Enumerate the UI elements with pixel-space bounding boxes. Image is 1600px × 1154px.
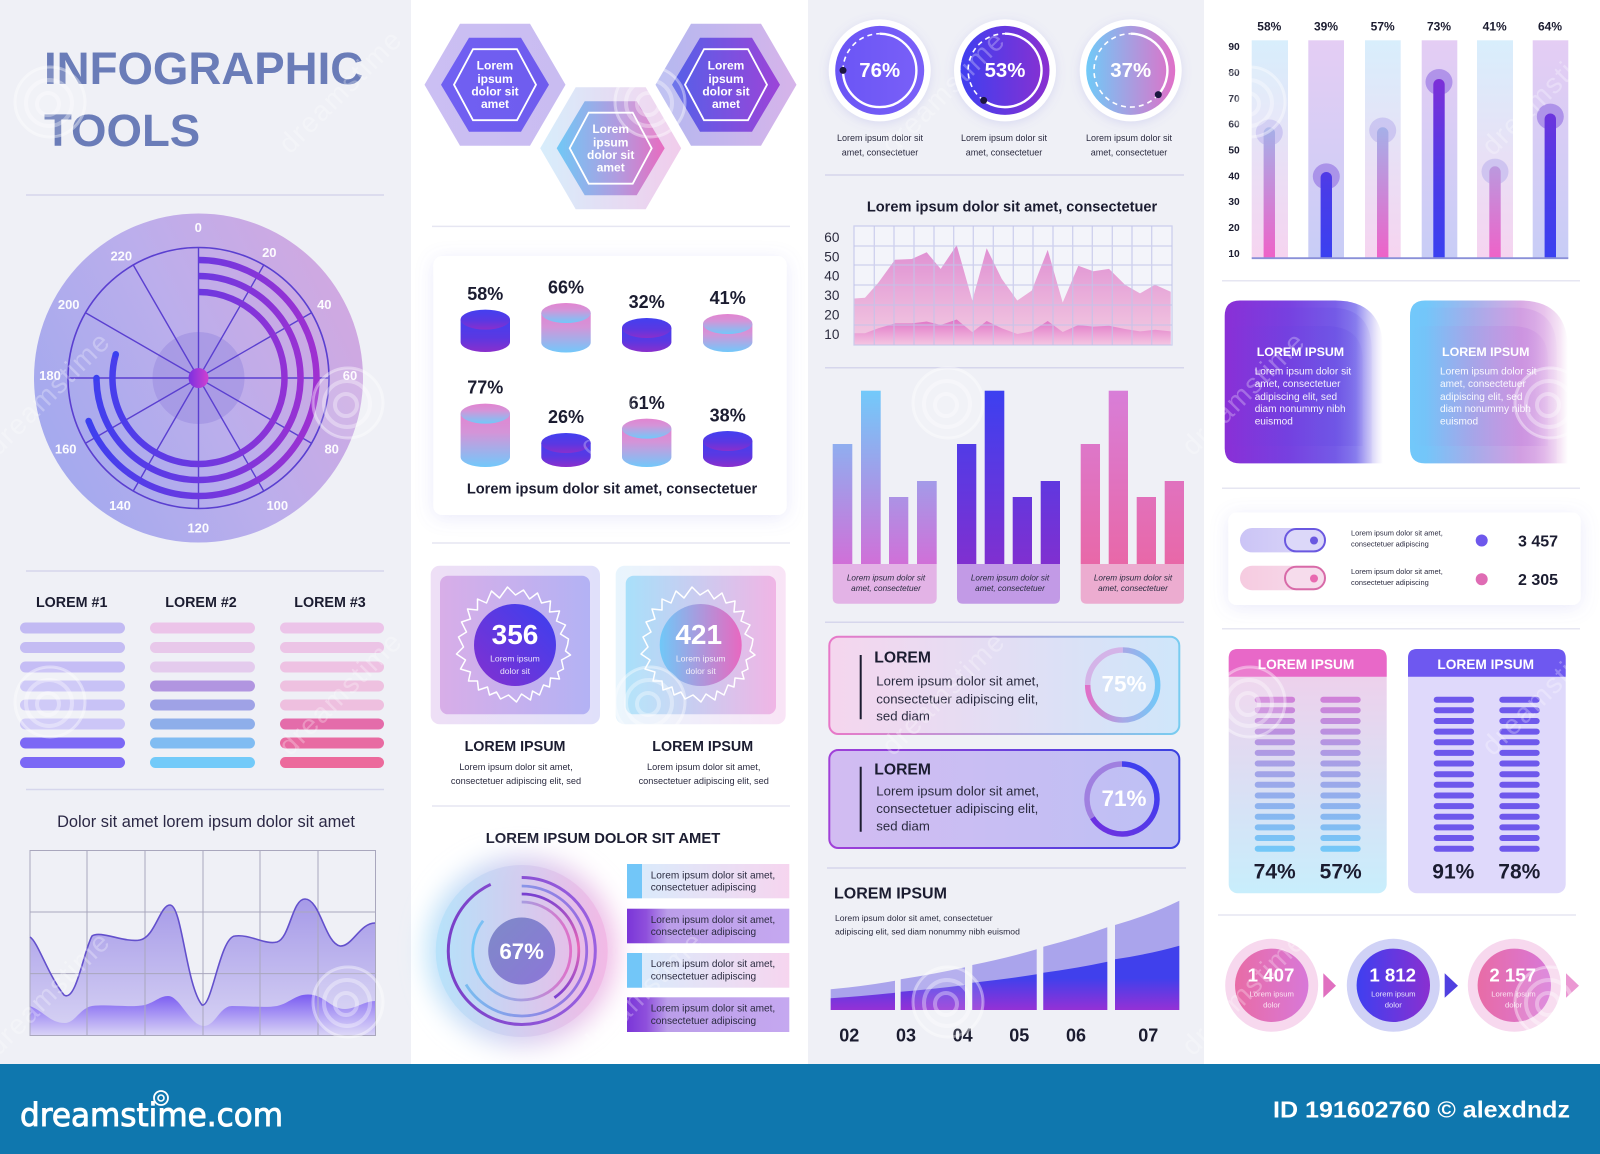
flow step 1: Lorem ipsum xyxy=(1249,990,1294,999)
text block: card 2 caption: consectetuer adipiscing elit, sed xyxy=(639,776,769,786)
cylinder 32%: 32% xyxy=(629,292,665,312)
growth chart: 06 xyxy=(1066,1026,1086,1046)
hexagon 3: ipsum xyxy=(708,72,744,86)
legend row 4: consectetuer adipiscing xyxy=(651,1016,756,1027)
panel: column 4, lollipops, cards, toggles, meters, flow xyxy=(1204,0,1600,1064)
radar chart: 20 xyxy=(262,245,277,260)
panel: column 1, title, radar, bars, area chart xyxy=(0,0,411,1064)
mountain area chart: 40 xyxy=(824,269,840,284)
text block: card 2 caption: Lorem ipsum dolor sit amet, xyxy=(647,762,760,772)
heading: area chart: Dolor sit amet lorem ipsum dolor sit amet xyxy=(57,813,355,831)
stat card 356: Lorem ipsum xyxy=(490,654,540,664)
lollipop column chart: 20 xyxy=(1228,223,1240,234)
panel: cylinder percentages xyxy=(433,256,787,515)
toggle row 1: consectetuer adipiscing xyxy=(1351,540,1429,548)
mountain area chart: 50 xyxy=(824,249,840,264)
lollipop column chart: 58% xyxy=(1257,19,1282,33)
lollipop column chart: 10 xyxy=(1228,249,1240,260)
lollipop column chart: 57% xyxy=(1371,19,1395,33)
legend row 1: Lorem ipsum dolor sit amet, xyxy=(651,870,775,881)
gauge 37%: 37% xyxy=(1110,60,1151,82)
watermark text: dreamstime xyxy=(875,625,1011,761)
bar group 1 xyxy=(833,391,937,604)
callout card 71%: sed diam xyxy=(876,818,930,833)
callout card 71%: Lorem ipsum dolor sit amet, xyxy=(876,783,1039,798)
lollipop column chart: 50 xyxy=(1228,145,1240,156)
stat card 356: dolor sit xyxy=(500,666,531,676)
meter card pink: LOREM IPSUM xyxy=(1258,657,1354,672)
cylinder 41% xyxy=(703,288,752,352)
legend row 2: Lorem ipsum dolor sit amet, xyxy=(651,915,775,926)
radar chart: 120 xyxy=(187,520,209,535)
meter card violet: 78% xyxy=(1498,860,1541,883)
text block: card 2 caption: LOREM IPSUM xyxy=(652,739,753,755)
toggle row 1 xyxy=(1240,528,1558,552)
toggle stats card xyxy=(1228,512,1581,605)
cylinder 77%: 77% xyxy=(467,378,503,398)
legend row 2 xyxy=(627,909,789,943)
arrow 1 xyxy=(1323,973,1336,998)
hexagon 2 xyxy=(540,87,681,209)
gradient card purple: euismod xyxy=(1255,417,1293,428)
gauge captions: amet, consectetuer xyxy=(966,147,1042,157)
stacked bars: Lorem 2: LOREM #2 xyxy=(165,595,237,611)
flow step 2: Lorem ipsum xyxy=(1371,990,1416,999)
hexagon 1 xyxy=(424,24,566,146)
callout card 71% xyxy=(829,750,1179,848)
flow step 2: dolor xyxy=(1385,1001,1402,1010)
cylinder 38% xyxy=(703,405,752,467)
gauge captions: Lorem ipsum dolor sit xyxy=(837,133,924,143)
legend row 1: consectetuer adipiscing xyxy=(651,883,756,894)
growth chart: 03 xyxy=(896,1026,916,1046)
flow step 1: dolor xyxy=(1263,1001,1281,1010)
title: TOOLS xyxy=(44,105,200,156)
cylinder 77% xyxy=(461,378,510,467)
radar chart: 220 xyxy=(110,248,132,264)
cylinder 26% xyxy=(541,407,591,467)
panel: column 2, hexagons, cylinders, cards, donut xyxy=(411,0,808,1064)
radar chart: 160 xyxy=(55,442,77,456)
growth chart: adipiscing elit, sed diam nonummy nibh euismod xyxy=(835,927,1020,937)
toggle row 1: Lorem ipsum dolor sit amet, xyxy=(1351,528,1443,537)
cylinder 41%: 41% xyxy=(710,288,746,308)
gauge captions: amet, consectetuer xyxy=(1091,147,1167,157)
bar group 2: amet, consectetuer xyxy=(975,584,1045,593)
gradient card purple: amet, consectetuer xyxy=(1255,379,1341,390)
hexagon 3: amet xyxy=(712,97,740,111)
lollipop column chart: 73% xyxy=(1427,19,1451,33)
gauge captions: Lorem ipsum dolor sit xyxy=(1086,133,1173,143)
hexagon 3: Lorem xyxy=(708,59,744,73)
title: INFOGRAPHIC xyxy=(44,43,363,94)
gauge 53% xyxy=(954,19,1056,121)
hexagon 1: ipsum xyxy=(477,72,513,86)
lollipop column chart: 80 xyxy=(1228,68,1240,79)
stacked bars: Lorem 2 xyxy=(150,595,255,768)
watermark text: dreamstime xyxy=(1175,325,1311,461)
gradient card blue: adipiscing elit, sed xyxy=(1440,392,1522,403)
bar group 2: Lorem ipsum dolor sit xyxy=(971,574,1050,582)
legend row 3: Lorem ipsum dolor sit amet, xyxy=(651,959,775,970)
flow step 3: dolor xyxy=(1505,1001,1522,1010)
watermark text: dreamstime xyxy=(1175,925,1311,1061)
bar group 1: Lorem ipsum dolor sit xyxy=(847,574,926,582)
stacked bars: Lorem 3: LOREM #3 xyxy=(294,595,366,611)
watermark text: dreamstime xyxy=(272,625,408,761)
radar chart: 60 xyxy=(343,368,357,383)
callout card 75% xyxy=(829,637,1179,734)
callout card 75%: LOREM xyxy=(874,650,931,667)
cylinder 32% xyxy=(622,292,671,352)
gauge 76% xyxy=(829,19,931,121)
callout card 75%: Lorem ipsum dolor sit amet, xyxy=(876,674,1039,689)
text block: card 1 caption: consectetuer adipiscing elit, sed xyxy=(451,776,581,786)
hexagon 1: amet xyxy=(481,97,509,111)
watermark text: dreamstime xyxy=(272,23,408,159)
cylinder 58%: 58% xyxy=(467,284,503,304)
toggle row 2: Lorem ipsum dolor sit amet, xyxy=(1351,567,1443,576)
lollipop column chart: 90 xyxy=(1228,42,1240,53)
legend row 4: Lorem ipsum dolor sit amet, xyxy=(651,1004,775,1015)
meter card violet xyxy=(1408,649,1566,893)
radar chart: 140 xyxy=(109,498,131,513)
legend row 4 xyxy=(627,997,789,1032)
growth chart: 02 xyxy=(839,1026,859,1046)
footer banner xyxy=(0,1064,1600,1154)
gauge captions xyxy=(837,133,1173,157)
heading: donut section: LOREM IPSUM DOLOR SIT AMET xyxy=(486,831,720,847)
toggle row 2: consectetuer adipiscing xyxy=(1351,578,1429,587)
callout card 71%: LOREM xyxy=(874,761,931,778)
arrow 2 xyxy=(1445,973,1458,998)
gradient card purple: diam nonummy nibh xyxy=(1255,404,1346,415)
arrow 3 xyxy=(1566,973,1579,998)
callout card 75%: 75% xyxy=(1101,672,1147,697)
legend row 3 xyxy=(627,953,789,988)
icon: logo spiral xyxy=(154,1091,168,1105)
growth chart: Lorem ipsum dolor sit amet, consectetuer xyxy=(835,913,993,923)
legend row 2: consectetuer adipiscing xyxy=(651,927,756,938)
stat card 421: 421 xyxy=(675,619,722,650)
stat card 356: 356 xyxy=(492,619,538,650)
cylinder 38%: 38% xyxy=(710,405,746,425)
mountain area chart: 10 xyxy=(824,327,840,342)
legend row 3: consectetuer adipiscing xyxy=(651,972,756,982)
flow step 3: Lorem ipsum xyxy=(1491,990,1536,999)
text block: card 1 caption xyxy=(451,739,581,786)
cylinder 66% xyxy=(541,278,591,352)
lollipop column chart: 41% xyxy=(1483,19,1507,33)
flow step 1: 1 407 xyxy=(1248,965,1294,986)
hexagon 2: dolor sit xyxy=(587,148,634,162)
gradient card blue xyxy=(1410,300,1568,463)
cylinder 61%: 61% xyxy=(629,393,665,413)
stacked bars: Lorem 1 xyxy=(20,595,125,768)
hexagon 1: Lorem xyxy=(477,59,513,73)
hexagon trio xyxy=(424,24,796,209)
gauge 37% xyxy=(1080,19,1182,121)
cylinder caption: Lorem ipsum dolor sit amet, consectetuer xyxy=(467,482,757,498)
gradient card blue: amet, consectetuer xyxy=(1440,379,1526,390)
cylinder 61% xyxy=(622,393,671,467)
hexagon 1: dolor sit xyxy=(471,84,519,98)
heading: mountain chart: Lorem ipsum dolor sit amet, consectetuer xyxy=(867,200,1157,216)
lollipop column chart: 60 xyxy=(1228,120,1240,131)
image id and author: ID 191602760 © alexdndz xyxy=(1273,1097,1570,1123)
flow step 1 xyxy=(1225,939,1318,1032)
lollipop column chart: 64% xyxy=(1538,19,1562,33)
lollipop column chart: 30 xyxy=(1228,197,1240,208)
wave area chart xyxy=(30,850,376,1036)
gradient card purple: LOREM IPSUM xyxy=(1257,345,1344,359)
callout card 75%: sed diam xyxy=(876,708,930,723)
lollipop column chart: 40 xyxy=(1228,172,1240,182)
callout card 71%: consectetuer adipiscing elit, xyxy=(876,801,1038,816)
hexagon 3: dolor sit xyxy=(702,84,750,98)
meter card violet: 91% xyxy=(1432,860,1475,883)
watermark text: dreamstime xyxy=(573,925,709,1061)
lollipop column chart: 70 xyxy=(1228,94,1240,105)
growth chart: 05 xyxy=(1009,1026,1029,1046)
stat card 356 xyxy=(431,566,600,724)
bar group 3: Lorem ipsum dolor sit xyxy=(1094,574,1173,582)
text block: card 2 caption xyxy=(639,739,769,786)
bar group 3 xyxy=(1081,391,1184,604)
radar chart xyxy=(34,214,363,542)
gauge 76%: 76% xyxy=(859,60,900,82)
flow step 2 xyxy=(1347,939,1440,1032)
callout card 75%: consectetuer adipiscing elit, xyxy=(876,691,1038,706)
growth chart: 07 xyxy=(1138,1026,1158,1046)
gauge 53%: 53% xyxy=(985,60,1025,82)
bar group 1: amet, consectetuer xyxy=(851,584,921,593)
mountain area chart: 60 xyxy=(824,230,840,245)
gradient card blue: diam nonummy nibh xyxy=(1440,404,1531,415)
radar chart: 180 xyxy=(39,368,61,383)
gradient card blue: Lorem ipsum dolor sit xyxy=(1440,366,1537,378)
growth chart xyxy=(831,885,1179,1046)
flow step 3 xyxy=(1468,939,1561,1032)
gauge captions: amet, consectetuer xyxy=(842,147,918,157)
mountain area chart: 30 xyxy=(824,288,840,303)
flow step 2: 1 812 xyxy=(1369,965,1416,986)
callout card 71%: 71% xyxy=(1101,786,1147,811)
gradient card blue: LOREM IPSUM xyxy=(1442,345,1529,359)
hexagon 2: amet xyxy=(597,160,625,174)
stacked bars: Lorem 1: LOREM #1 xyxy=(36,595,107,611)
donut chart 67%: 67% xyxy=(499,939,544,964)
gradient card blue: euismod xyxy=(1440,417,1478,428)
donut chart 67% xyxy=(428,857,616,1045)
bar group 3: amet, consectetuer xyxy=(1098,584,1168,593)
stat card 421 xyxy=(616,566,786,724)
meter card pink: 57% xyxy=(1320,860,1362,883)
radar chart: 0 xyxy=(195,220,202,235)
cylinder 58% xyxy=(461,284,510,352)
gradient card purple xyxy=(1225,300,1383,463)
hexagon 2: ipsum xyxy=(593,135,628,149)
gradient card purple: Lorem ipsum dolor sit xyxy=(1255,366,1351,378)
growth chart: 04 xyxy=(953,1026,973,1046)
growth chart: LOREM IPSUM xyxy=(834,885,947,902)
title xyxy=(44,43,363,156)
stacked bars: Lorem 3 xyxy=(280,595,384,768)
lollipop column chart: 39% xyxy=(1314,19,1338,33)
toggle row 2: 2 305 xyxy=(1518,572,1558,589)
watermark text: dreamstime xyxy=(573,325,709,461)
text block: card 1 caption: LOREM IPSUM xyxy=(465,739,565,755)
toggle row 2 xyxy=(1240,566,1558,590)
radar chart: 40 xyxy=(317,297,332,312)
hexagon 3 xyxy=(656,24,796,146)
gradient card purple: adipiscing elit, sed xyxy=(1255,392,1337,403)
text block: card 1 caption: Lorem ipsum dolor sit amet, xyxy=(459,762,573,772)
radar chart: 100 xyxy=(266,498,288,513)
logo text: dreamstime.com xyxy=(20,1096,283,1134)
stat card 421: dolor sit xyxy=(686,666,716,676)
toggle row 1: 3 457 xyxy=(1518,534,1558,550)
watermark text: dreamstime xyxy=(875,24,1011,160)
bar group 2 xyxy=(957,391,1060,604)
radar chart: 200 xyxy=(58,297,80,312)
cylinder 66%: 66% xyxy=(548,278,584,298)
meter card pink: 74% xyxy=(1254,860,1296,883)
radar chart: 80 xyxy=(324,442,339,456)
panel: column 3, gauges, charts, cards xyxy=(808,0,1204,1064)
flow step 3: 2 157 xyxy=(1489,965,1536,986)
mountain area chart xyxy=(824,226,1172,345)
lollipop column chart xyxy=(1228,19,1568,260)
cylinder 26%: 26% xyxy=(548,407,584,427)
mountain area chart: 20 xyxy=(824,308,840,322)
gauge captions: Lorem ipsum dolor sit xyxy=(961,133,1048,143)
hexagon 2: Lorem xyxy=(592,122,629,136)
legend row 1 xyxy=(627,864,789,898)
meter card violet: LOREM IPSUM xyxy=(1437,657,1534,672)
stat card 421: Lorem ipsum xyxy=(676,654,726,664)
meter card pink xyxy=(1229,649,1387,893)
